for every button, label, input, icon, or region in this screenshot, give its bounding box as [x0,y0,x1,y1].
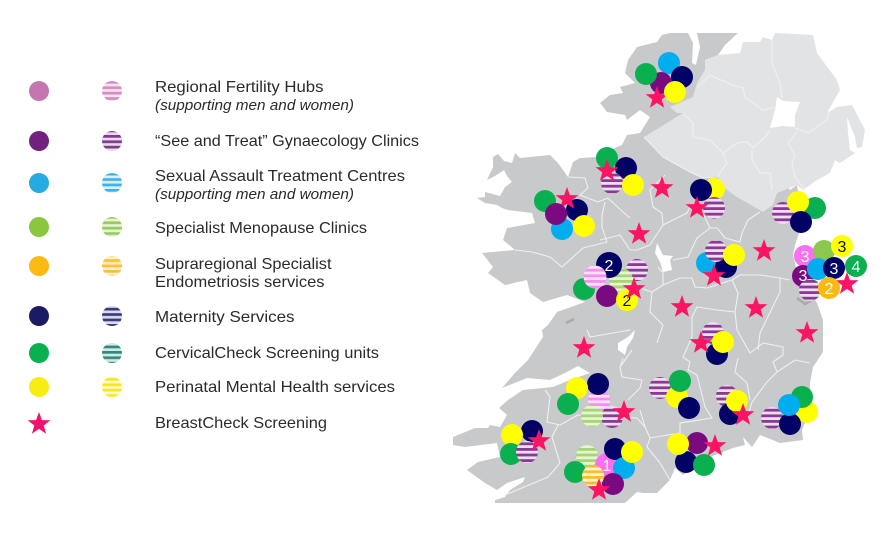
cluster: Tipperary [649,370,700,419]
cluster: Louth [772,191,826,233]
legend row: Regional Fertility Hubs: (supporting men and women) [155,97,354,114]
legend row: Supraregional Specialist Endometriosis services: Endometriosis services [155,274,324,291]
legend row: Supraregional Specialist Endometriosis services: Supraregional Specialist [155,256,332,273]
cluster: Galway: 2 [605,258,614,275]
cluster: Dublin: 2 [825,281,834,298]
cluster: Dublin: 3 [838,239,847,256]
cluster: Mayo [534,187,595,240]
legend row: Maternity Services: Maternity Services [155,309,294,326]
cluster: Dublin: 3 [801,249,810,266]
stars: Leinster [671,239,818,343]
cluster: Cork: 1 [603,458,612,475]
republic landmass [453,33,823,503]
star: Leitrim [651,176,673,198]
cluster: Dublin: 3 [830,261,839,278]
legend row: Specialist Menopause Clinics [29,217,367,237]
legend row: Sexual Assault Treatment Centres: Sexual Assault Treatment Centres [155,168,405,185]
map of Ireland [453,33,865,503]
cluster: Dublin: 4 [852,259,861,276]
legend row: Sexual Assault Treatment Centres: (supporting men and women) [155,186,354,203]
cluster: Limerick [557,373,635,428]
legend row: See and Treat Gynaecology Clinics: “See and Treat” Gynaecology Clinics [155,133,419,150]
legend row: Regional Fertility Hubs [29,79,354,114]
legend row: Perinatal Mental Health services [29,377,395,397]
cluster: Galway: 2 [623,293,632,310]
cluster: Cork [564,438,643,500]
legend row: BreastCheck Screening [28,412,327,434]
cluster: Waterford [667,432,726,476]
legend row: Regional Fertility Hubs: Regional Fertility Hubs [155,79,324,96]
legend row: Specialist Menopause Clinics: Specialist Menopause Clinics [155,220,367,237]
lakes [618,97,800,355]
legend row: Supraregional Specialist Endometriosis services [29,256,332,291]
cluster: Sligo [596,147,644,196]
legend row: Perinatal Mental Health services: Perinatal Mental Health services [155,379,395,396]
legend row: See and Treat Gynaecology Clinics [29,131,419,151]
cluster: Midlands [696,240,745,286]
legend row: Sexual Assault Treatment Centres [29,168,405,203]
shaded bay marks [566,298,812,323]
legend row: Maternity Services [29,306,294,326]
cluster: Dublin: 3 [799,268,808,285]
legend row: BreastCheck Screening: BreastCheck Screening [155,415,327,432]
legend row: CervicalCheck Screening units [29,343,379,363]
legend row: CervicalCheck Screening units: CervicalCheck Screening units [155,345,379,362]
star: Roscommon [628,222,650,244]
cluster: Offaly [690,322,734,365]
cluster: Donegal [635,52,693,108]
cluster: Kerry [500,420,550,465]
cluster: Galway [573,252,648,311]
star: Clare [573,336,595,358]
cluster: Kilkenny [716,385,754,425]
cluster: Cavan [686,178,725,219]
cluster: Wexford [761,386,818,435]
cluster: Dublin [792,235,867,301]
county borders [505,40,829,495]
legend [28,79,419,434]
Northern Ireland [644,33,865,212]
